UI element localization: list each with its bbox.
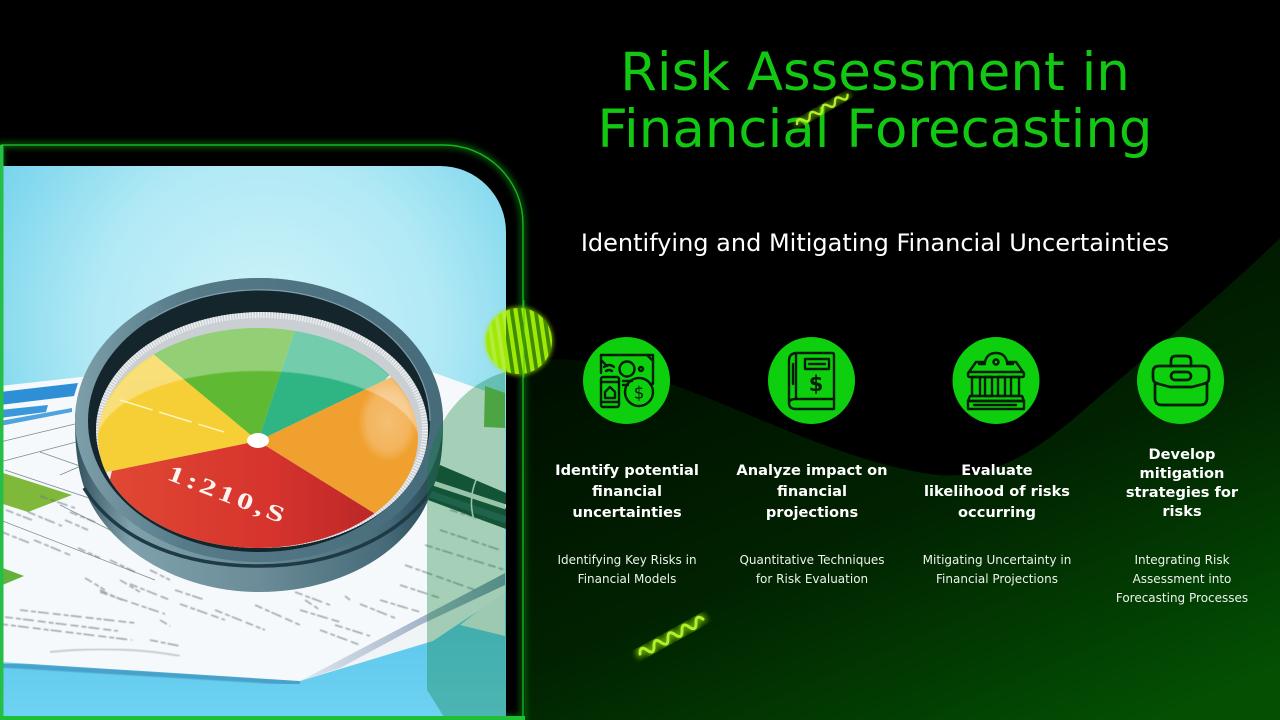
description: Quantitative Techniques <box>739 553 885 567</box>
icon: finance book <box>768 337 855 424</box>
heading: likelihood of risks <box>924 483 1070 500</box>
icon: bank building <box>952 337 1040 424</box>
heading <box>924 462 1070 521</box>
pie: orange <box>266 377 418 514</box>
magnifier top rim <box>75 278 443 562</box>
table rules on report <box>0 424 155 580</box>
icon: briefcase <box>1137 337 1224 424</box>
translucent overlay shape <box>427 372 506 720</box>
squiggle over title <box>796 92 849 127</box>
magnifier handle <box>428 465 506 529</box>
pie: green <box>154 328 294 435</box>
sky backdrop <box>4 166 506 600</box>
icon: banknote, phone and coin: $ <box>634 384 644 404</box>
fold shade on report <box>50 649 180 656</box>
squiggle bottom <box>638 616 705 657</box>
column 2: analyze impact <box>736 337 888 586</box>
heading: financial <box>592 483 662 500</box>
base shadow line <box>84 486 434 566</box>
description <box>739 553 885 586</box>
column 1: identify uncertainties <box>555 337 699 586</box>
report text lines <box>0 496 505 646</box>
decorative striped lime circle <box>482 300 558 380</box>
title: Risk Assessment in <box>620 42 1130 103</box>
pie: yellow <box>98 354 250 472</box>
description: for Risk Evaluation <box>756 572 868 586</box>
heading <box>1126 446 1239 520</box>
pie: red <box>110 443 374 548</box>
description: Identifying Key Risks in <box>557 553 697 567</box>
subtitle: Identifying and Mitigating Financial Uncertainties <box>581 229 1169 257</box>
green table cells <box>0 472 72 586</box>
shadow under report <box>0 665 300 683</box>
inner rim highlight <box>150 290 430 421</box>
glowing frame around image <box>2 145 523 718</box>
column 3: evaluate likelihood <box>923 337 1071 586</box>
description: Assessment into <box>1133 572 1231 586</box>
heading: Identify potential <box>555 462 699 479</box>
dark inner ring <box>88 290 430 552</box>
heading: occurring <box>958 504 1036 521</box>
orange highlight <box>360 386 416 460</box>
title <box>597 42 1153 160</box>
column 4: develop mitigation <box>1116 337 1248 605</box>
blue table <box>4 600 506 694</box>
gauge needle dashes <box>120 400 224 432</box>
gauge reading: 1:210,S <box>164 461 291 530</box>
description: Mitigating Uncertainty in <box>923 553 1071 567</box>
heading: projections <box>766 504 858 521</box>
heading: Evaluate <box>961 462 1033 479</box>
heading: risks <box>1162 503 1202 520</box>
description: Financial Models <box>578 572 676 586</box>
magnifier base rim <box>75 278 443 592</box>
description <box>923 553 1071 586</box>
heading: mitigation <box>1140 465 1224 482</box>
blue bars on report <box>0 383 78 426</box>
background green wave <box>525 238 1280 720</box>
heading: uncertainties <box>572 504 682 521</box>
pie: teal <box>260 331 390 436</box>
glass highlight crescent <box>98 328 418 434</box>
gauge pie chart <box>98 328 418 548</box>
description: Forecasting Processes <box>1116 591 1248 605</box>
green chart on back sheet <box>484 386 505 428</box>
heading: Develop <box>1149 446 1215 463</box>
photo: magnifying glass over financial reports <box>0 166 506 720</box>
description: Financial Projections <box>936 572 1058 586</box>
back sheets <box>300 565 505 681</box>
icon: banknote, phone and coin <box>583 337 670 424</box>
title: Financial Forecasting <box>597 99 1153 160</box>
description <box>1116 553 1248 605</box>
gauge hub <box>247 433 269 448</box>
description: Integrating Risk <box>1134 553 1230 567</box>
description <box>557 553 697 586</box>
heading: strategies for <box>1126 484 1239 501</box>
frame left and bottom bright edges <box>0 145 525 720</box>
heading <box>736 462 888 521</box>
heading: Analyze impact on <box>736 462 888 479</box>
main report sheet <box>4 372 505 681</box>
lens dial scale ring <box>96 312 428 548</box>
heading: financial <box>777 483 847 500</box>
heading <box>555 462 699 521</box>
icon: finance book: $ <box>809 372 823 396</box>
